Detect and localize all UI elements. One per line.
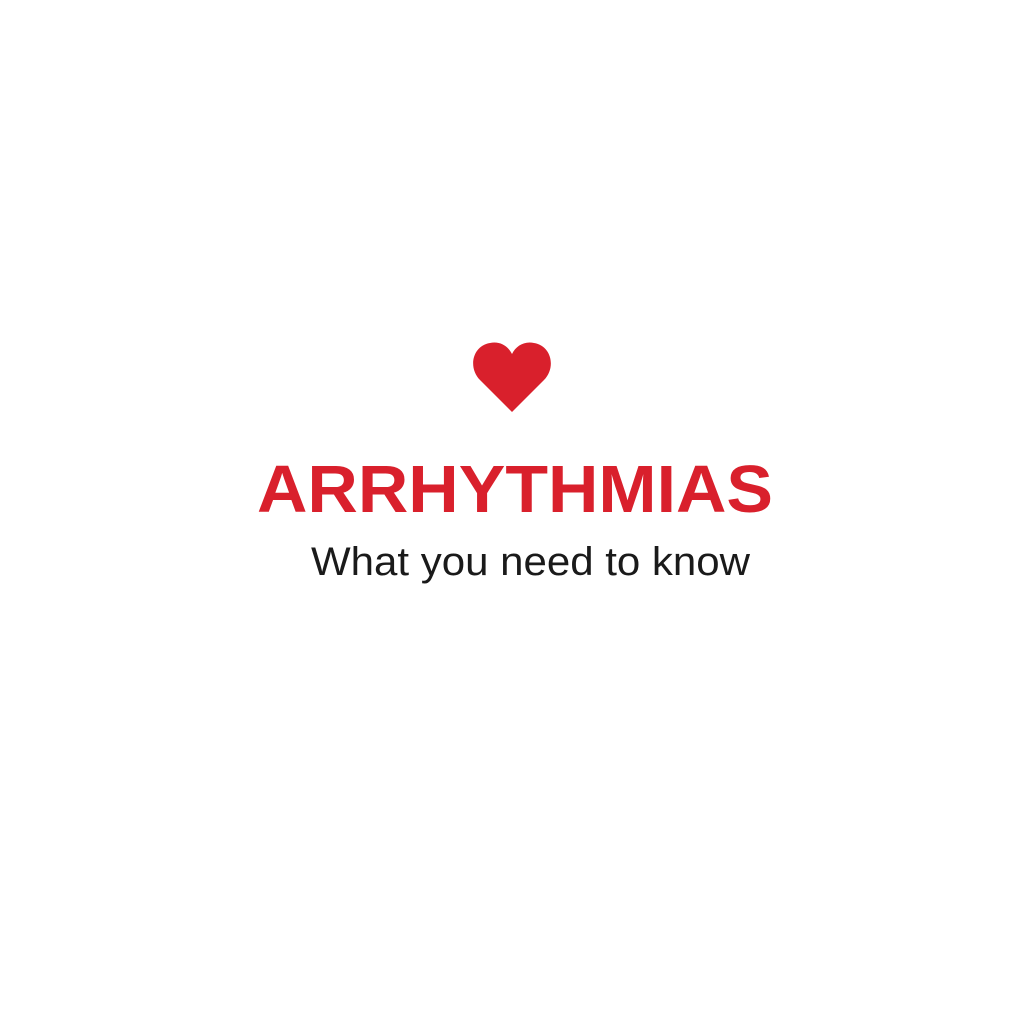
icon: heart — [473, 343, 551, 412]
subtitle: What you need to know — [311, 540, 750, 584]
title: ARRHYTHMIAS — [257, 452, 773, 527]
